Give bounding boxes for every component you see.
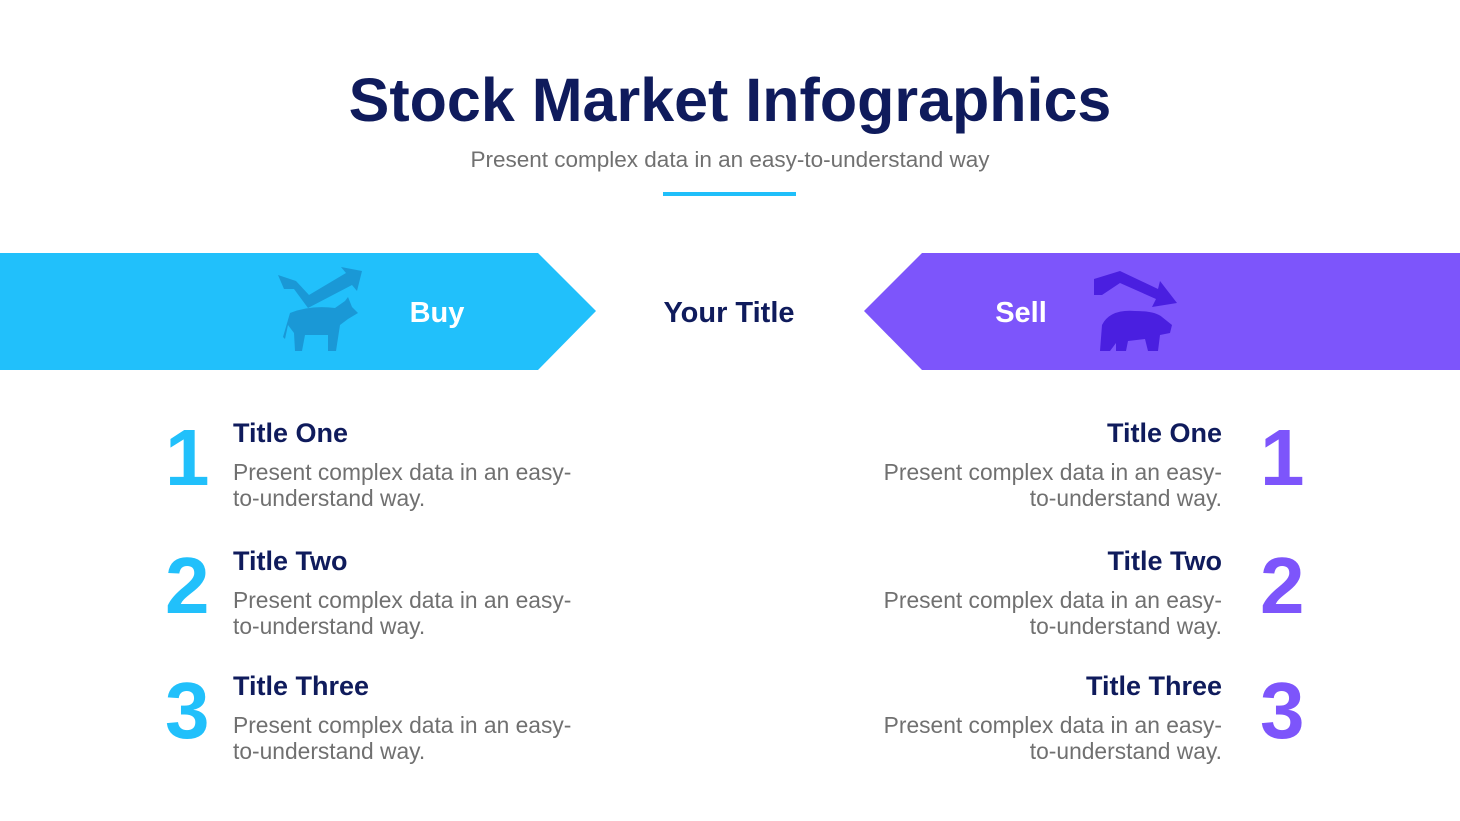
right item 2: 2 [1260,541,1304,630]
left item 1: Present complex data in an easy- [233,459,571,485]
right item 1: Present complex data in an easy- [884,459,1222,485]
right item 2: to-understand way. [1030,613,1222,639]
left item 2: 2 [165,541,210,630]
right item 1: Title One [1107,418,1222,448]
left item 2 [165,541,571,639]
left item 3: Present complex data in an easy- [233,712,571,738]
left item 3: Title Three [233,671,369,701]
label: sell: Sell [995,297,1047,329]
right item 3: Title Three [1086,671,1222,701]
subtitle: Present complex data in an easy-to-understand way [470,147,990,172]
right item 1: 1 [1260,413,1304,502]
left item 1: to-understand way. [233,485,425,511]
left item 1 [165,413,571,511]
title: Stock Market Infographics [349,66,1111,134]
sell arrow [864,253,1460,370]
right item 3 [884,666,1304,764]
buy arrow [0,253,596,370]
right item 1: to-understand way. [1030,485,1222,511]
right item 3: Present complex data in an easy- [884,712,1222,738]
icon: bear [1094,271,1177,351]
left item 1: 1 [165,413,210,502]
left item 2: Present complex data in an easy- [233,587,571,613]
right item 2: Present complex data in an easy- [884,587,1222,613]
banner [0,253,1460,370]
right item 3: to-understand way. [1030,738,1222,764]
left item 3: to-understand way. [233,738,425,764]
left item 3: 3 [165,666,210,755]
left item 3 [165,666,571,764]
right item 1 [884,413,1304,511]
right item 3: 3 [1260,666,1304,755]
right item 2: Title Two [1108,546,1222,576]
left item 1: Title One [233,418,348,448]
left item 2: to-understand way. [233,613,425,639]
icon: bull [278,267,362,351]
right item 2 [884,541,1304,639]
left item 2: Title Two [233,546,348,576]
underline accent [663,192,796,196]
label: buy: Buy [410,297,464,329]
label: your title: Your Title [663,297,795,329]
